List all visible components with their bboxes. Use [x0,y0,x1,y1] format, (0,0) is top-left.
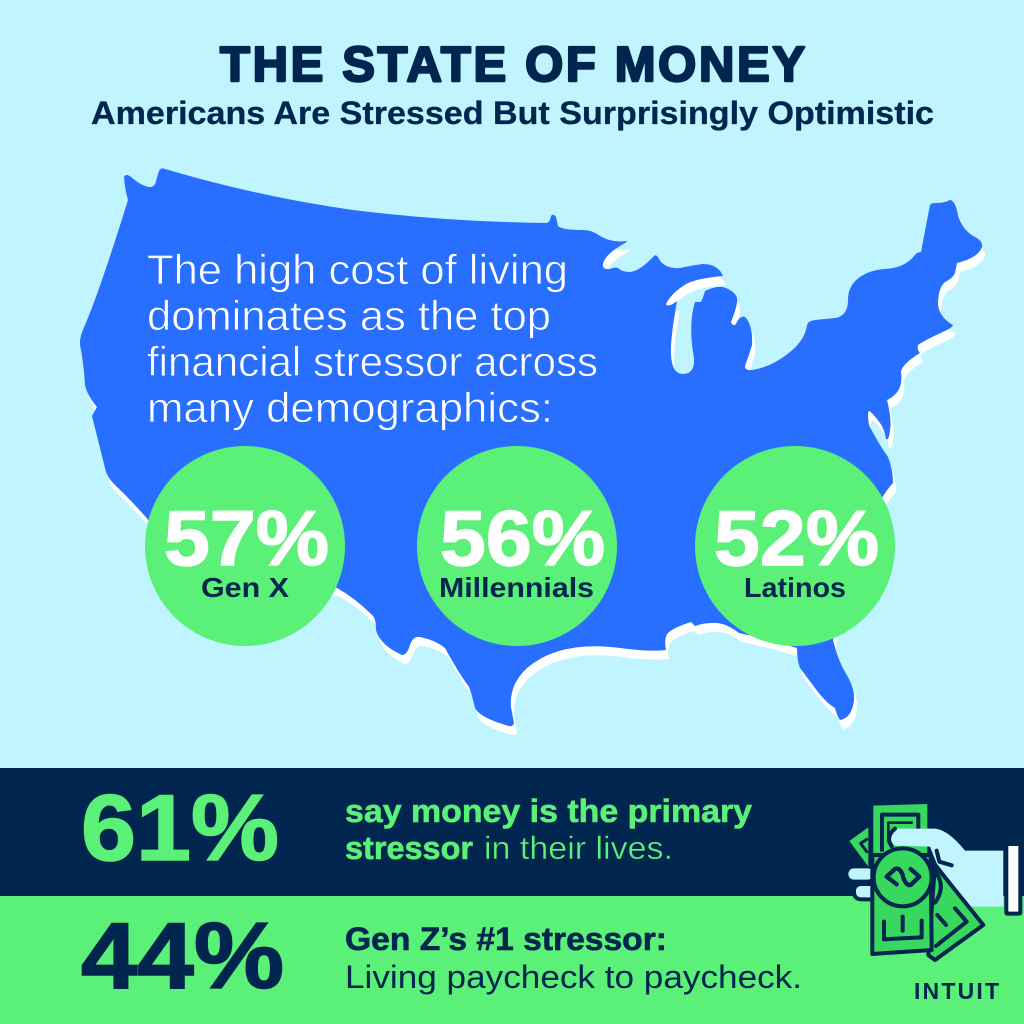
text: Gen Z stressor: Gen Z’s #1 stressor: [345,921,667,957]
text: Gen Z stressor [345,921,802,995]
stat circle: Millennials: Millennials [439,572,594,603]
stat circle: Latinos: Latinos [744,572,846,603]
stat circle: Latinos: 52% [714,494,879,582]
map of the United States [80,168,985,735]
stat: 61%: 61% [81,775,279,880]
band: 44% Gen Z [0,896,1024,1024]
intro text block: The high cost of living [147,246,568,293]
subtitle: Americans Are Stressed But Surprisingly Optimistic [91,95,934,131]
intro text block [147,246,598,431]
text: say money is the primary stressor: stressor [345,830,473,866]
band: 61% primary stressor [0,768,1024,896]
stat circle: Gen X: Gen X [201,572,289,603]
stat circle: Millennials: 56% [440,494,605,582]
text: say money is the primary stressor [345,793,752,866]
icon: hand holding money [848,804,1020,960]
text: Gen Z stressor: Living paycheck to paycheck. [345,959,802,995]
intro text block: dominates as the top [147,292,551,339]
intro text block: many demographics: [147,384,553,431]
stat circle: Gen X: 57% [164,494,329,582]
intro text block: financial stressor across [147,338,598,385]
title: THE STATE OF MONEY [220,38,805,92]
text: say money is the primary stressor: say money is the primary [345,793,752,829]
text: say money is the primary stressor: in their lives. [484,830,673,866]
stat circle: Latinos [695,446,895,646]
stat circle: Millennials [417,446,617,646]
stat circle: Gen X [145,446,345,646]
logo: Intuit: INTUIT [914,978,999,1004]
stat: 44%: 44% [81,903,284,1008]
